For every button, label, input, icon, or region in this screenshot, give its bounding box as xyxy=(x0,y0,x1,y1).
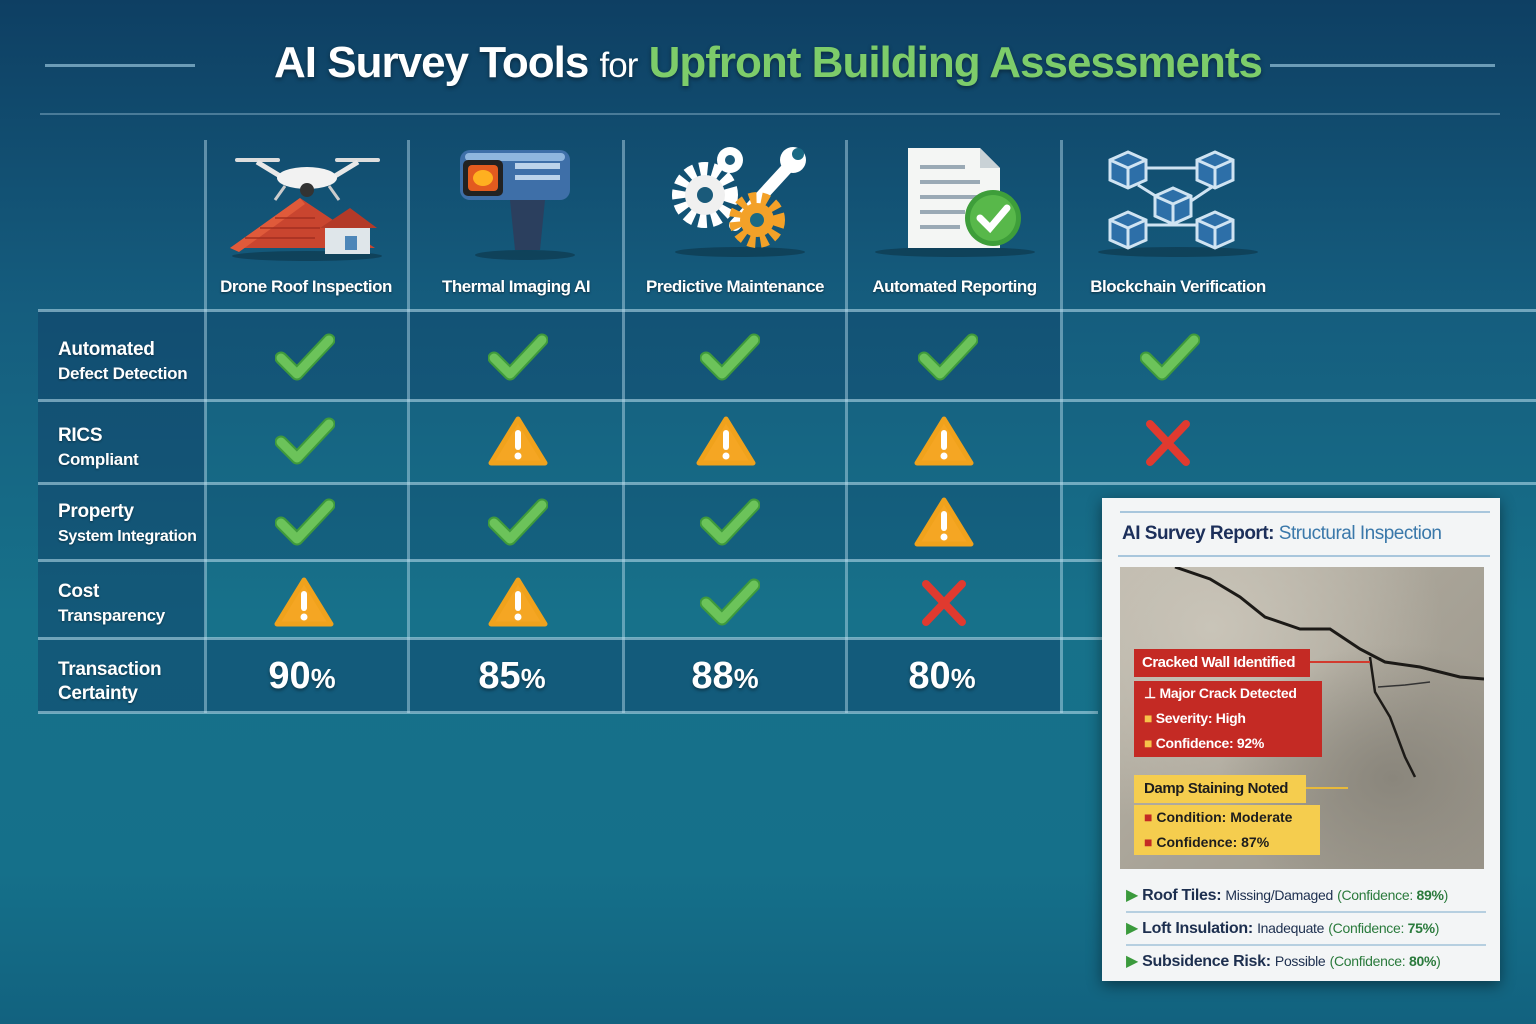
text: 85% xyxy=(478,655,546,697)
findings list: ▶ Subsidence Risk: Possible (Confidence: 80%) xyxy=(1126,953,1440,970)
text: 80% xyxy=(908,655,976,697)
text: Certainty xyxy=(58,683,138,704)
wall photo with annotations: ■ Severity: High xyxy=(1144,710,1246,726)
comparison table xyxy=(38,312,1060,713)
findings list: ▶ Loft Insulation: Inadequate (Confidence: 75%) xyxy=(1126,920,1439,937)
row labels: Defect Detection xyxy=(58,364,187,383)
column headers: Drone Roof Inspection xyxy=(220,277,392,296)
text: Cost xyxy=(58,581,99,602)
wall photo with annotations: Cracked Wall Identified xyxy=(1142,654,1295,671)
transaction certainty values: 90% xyxy=(268,655,336,697)
text: Automated Reporting xyxy=(872,277,1037,296)
text: Predictive Maintenance xyxy=(646,277,824,296)
text: Thermal Imaging AI xyxy=(442,277,590,296)
title: AI Survey Tools for Upfront Building Assessments xyxy=(274,38,1262,87)
wall photo with annotations: ■ Confidence: 87% xyxy=(1144,834,1269,850)
text: Transparency xyxy=(58,606,165,625)
text: Compliant xyxy=(58,450,138,469)
status icons xyxy=(275,334,335,380)
wall photo with annotations: Damp Staining Noted xyxy=(1144,780,1288,797)
title xyxy=(45,38,1495,90)
icon: gears and wrench xyxy=(672,147,806,257)
wall photo with annotations: ■ Condition: Moderate xyxy=(1144,809,1292,825)
text: Transaction xyxy=(58,659,161,680)
text: 88% xyxy=(691,655,759,697)
wall photo with annotations: ■ Confidence: 92% xyxy=(1144,735,1264,751)
row labels: Automated xyxy=(58,339,155,360)
text: RICS xyxy=(58,425,102,446)
text: Property xyxy=(58,501,134,522)
icon: report with check xyxy=(875,148,1035,257)
icon: blockchain cubes xyxy=(1098,150,1258,257)
report title: AI Survey Report: Structural Inspection xyxy=(1122,523,1441,544)
wall photo with annotations: ⊥ Major Crack Detected xyxy=(1144,685,1297,701)
wall photo with annotations xyxy=(1120,567,1484,869)
text: System Integration xyxy=(58,528,197,545)
text: Blockchain Verification xyxy=(1090,277,1266,296)
report card xyxy=(1102,498,1500,981)
findings list: ▶ Roof Tiles: Missing/Damaged (Confidence: 89%) xyxy=(1126,887,1448,904)
row labels xyxy=(58,339,188,383)
icon: thermal camera xyxy=(460,150,575,260)
icon: drone over roof xyxy=(230,158,382,261)
findings list xyxy=(1126,887,1486,970)
